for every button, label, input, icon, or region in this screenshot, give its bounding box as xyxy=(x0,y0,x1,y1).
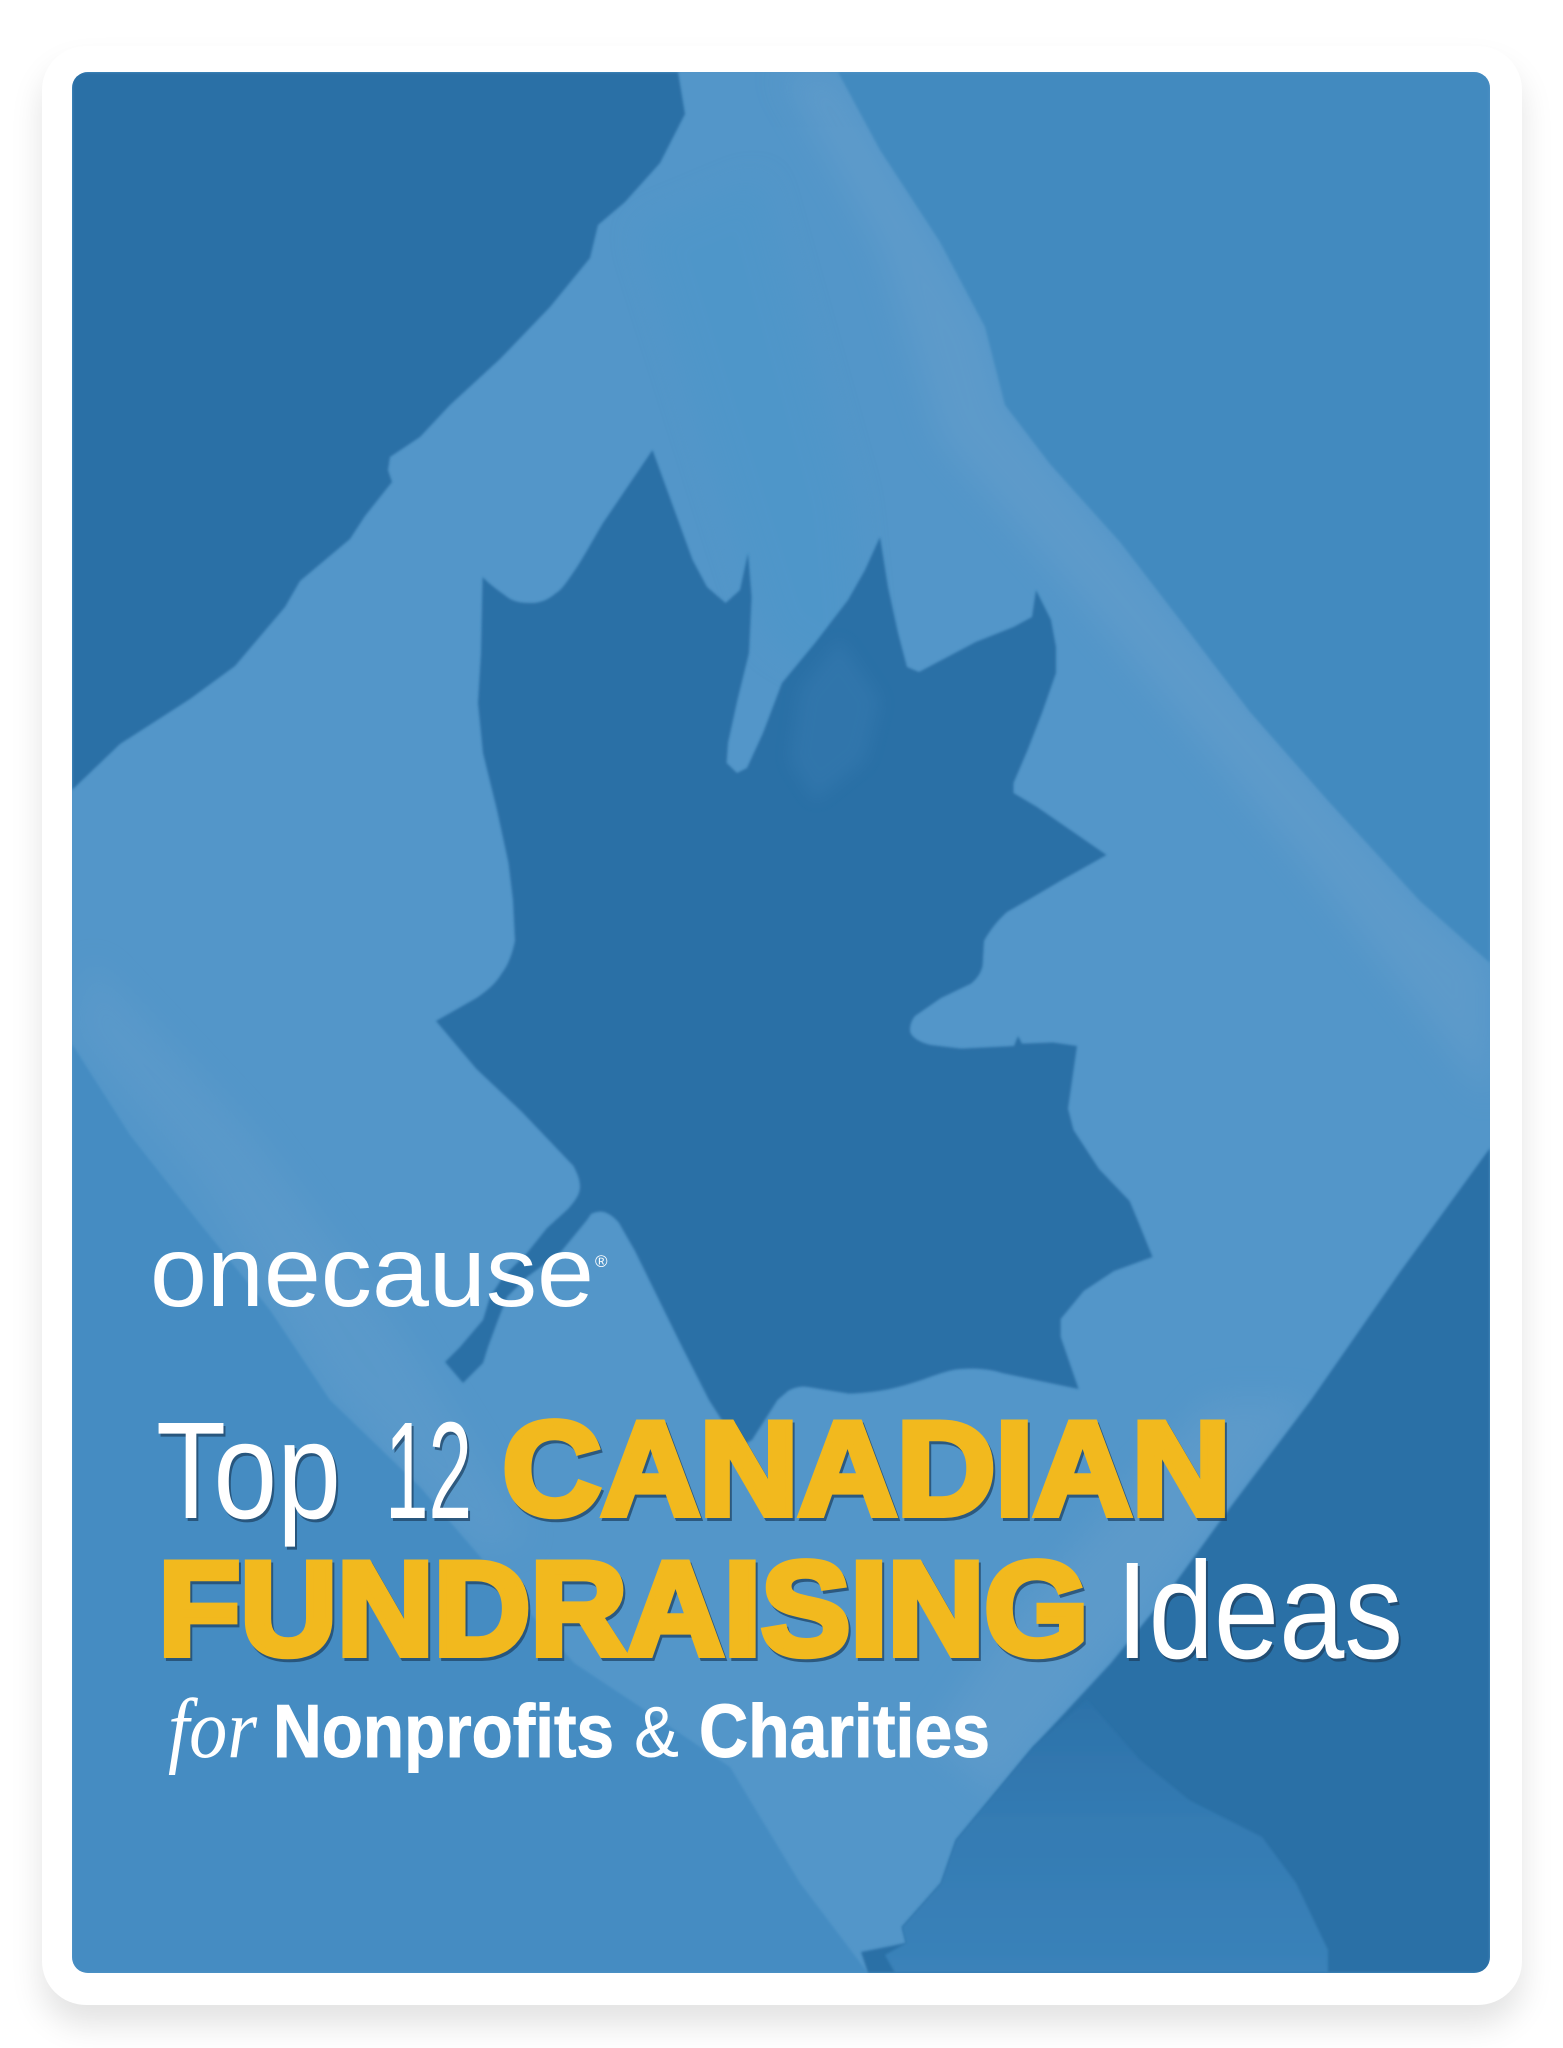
logo: onecause: onecause xyxy=(150,1216,594,1328)
subtitle: Charities xyxy=(699,1689,990,1773)
pale streak along upper right ridge xyxy=(820,98,1474,1039)
pale streak along lower right ridge xyxy=(966,1422,1260,1760)
subtitle: Nonprofits xyxy=(273,1689,614,1773)
pale streak on lower left lobe xyxy=(72,960,530,1550)
title xyxy=(156,1394,1403,1688)
dark blue upper left region xyxy=(72,72,685,790)
registered mark: ® xyxy=(595,1252,608,1271)
subtitle: for xyxy=(168,1682,258,1776)
dark blue lower right region xyxy=(861,1148,1490,1973)
medium blue upper right region xyxy=(838,72,1490,963)
maple leaf silhouette xyxy=(436,450,1152,1447)
subtitle: & xyxy=(634,1693,679,1773)
lighter fold in lower right region xyxy=(886,1745,1328,1972)
saturated streak in ice centre xyxy=(640,180,870,700)
title: Ideas: Ideas xyxy=(1116,1534,1403,1688)
title: FUNDRAISING: FUNDRAISING xyxy=(158,1536,1088,1684)
medium blue lower left region xyxy=(72,1044,868,1973)
faint lighter patch inside leaf xyxy=(790,640,880,800)
subtitle xyxy=(168,1682,990,1776)
title: CANADIAN: CANADIAN xyxy=(502,1396,1230,1544)
title: Top 12: 12 xyxy=(385,1394,472,1548)
title: Top 12: Top xyxy=(156,1394,341,1548)
